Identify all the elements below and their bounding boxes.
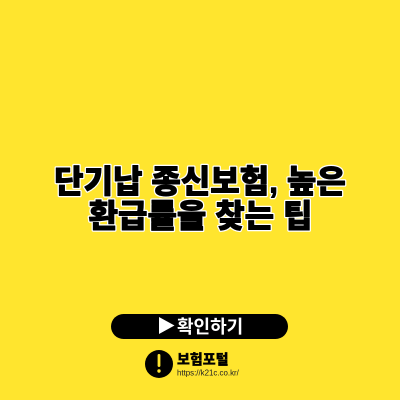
- title: 환급률을 찾는 팁: [89, 198, 312, 234]
- title: 단기납 종신보험, 높은: [54, 164, 346, 200]
- button label: 확인하기: [177, 317, 243, 337]
- title: 환급률을 찾는 팁: [89, 198, 312, 234]
- title: [54, 164, 346, 234]
- logo name: 보험포털: [177, 352, 229, 368]
- button: confirm: [111, 314, 288, 339]
- logo url: https://k21c.co.kr/: [177, 368, 240, 378]
- icon: exclamation circle: [145, 350, 173, 378]
- icon: play triangle: [159, 317, 174, 334]
- title: 단기납 종신보험, 높은: [54, 164, 346, 200]
- logo: insurance portal: [145, 350, 240, 378]
